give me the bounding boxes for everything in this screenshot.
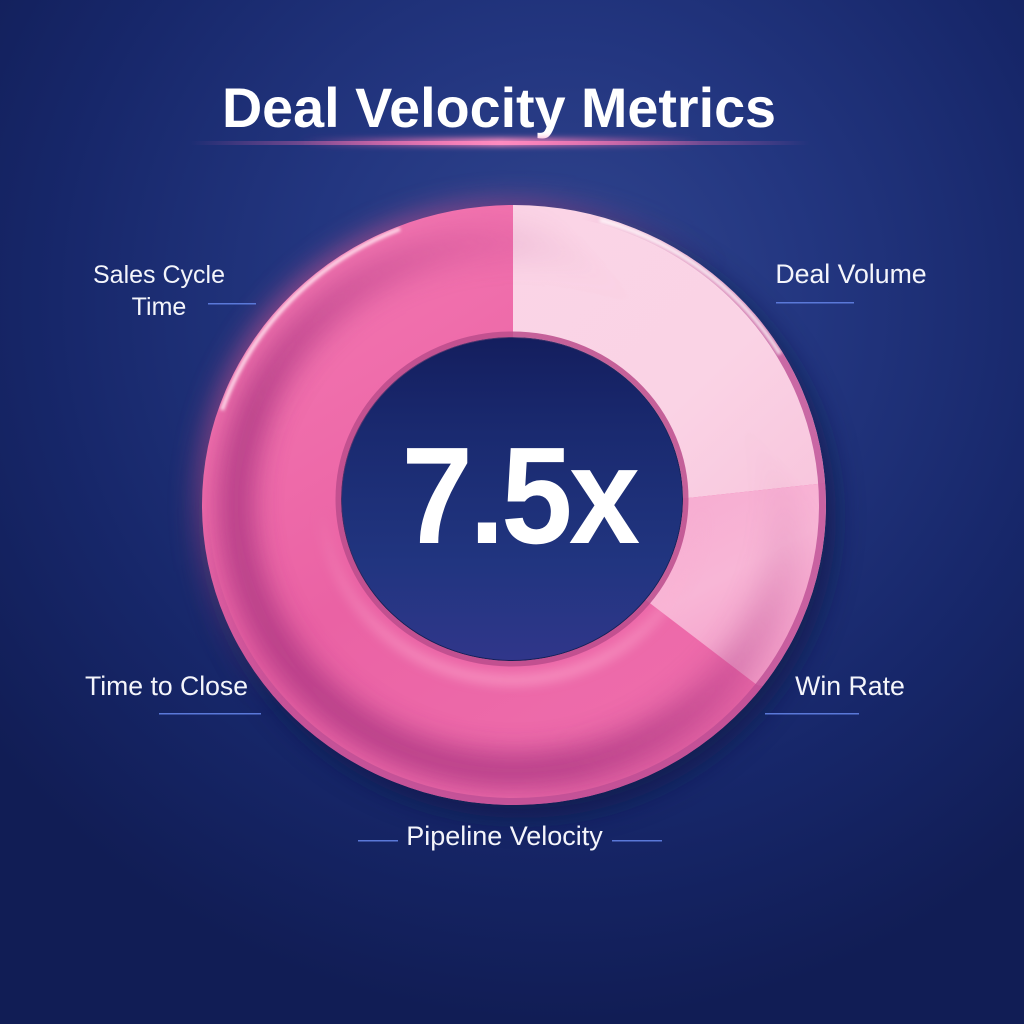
segment: Deal Volume	[513, 190, 840, 498]
label: Deal Volume: Deal Volume	[775, 259, 927, 289]
label: Win Rate: Win Rate	[795, 671, 905, 701]
label: Win Rate	[765, 671, 905, 714]
label: Sales Cycle Time	[93, 261, 256, 321]
label: Sales Cycle Time: Sales Cycle	[93, 261, 225, 289]
label: Sales Cycle Time: Time	[132, 293, 186, 321]
title underline glow	[190, 138, 810, 146]
title: Deal Velocity Metrics	[222, 77, 776, 139]
outer bevel	[206, 208, 822, 802]
segment: Win Rate	[646, 484, 826, 686]
label: Time to Close: Time to Close	[85, 671, 248, 701]
ring shading	[206, 208, 822, 802]
centre value: 7.5x	[402, 419, 640, 573]
segment: Sales Cycle Time, Time to Close, Pipeline Velocity	[190, 190, 840, 820]
label: Pipeline Velocity: Pipeline Velocity	[406, 821, 603, 851]
donut chart	[190, 190, 840, 820]
inner bevel	[338, 334, 686, 664]
centre hole	[342, 338, 682, 660]
